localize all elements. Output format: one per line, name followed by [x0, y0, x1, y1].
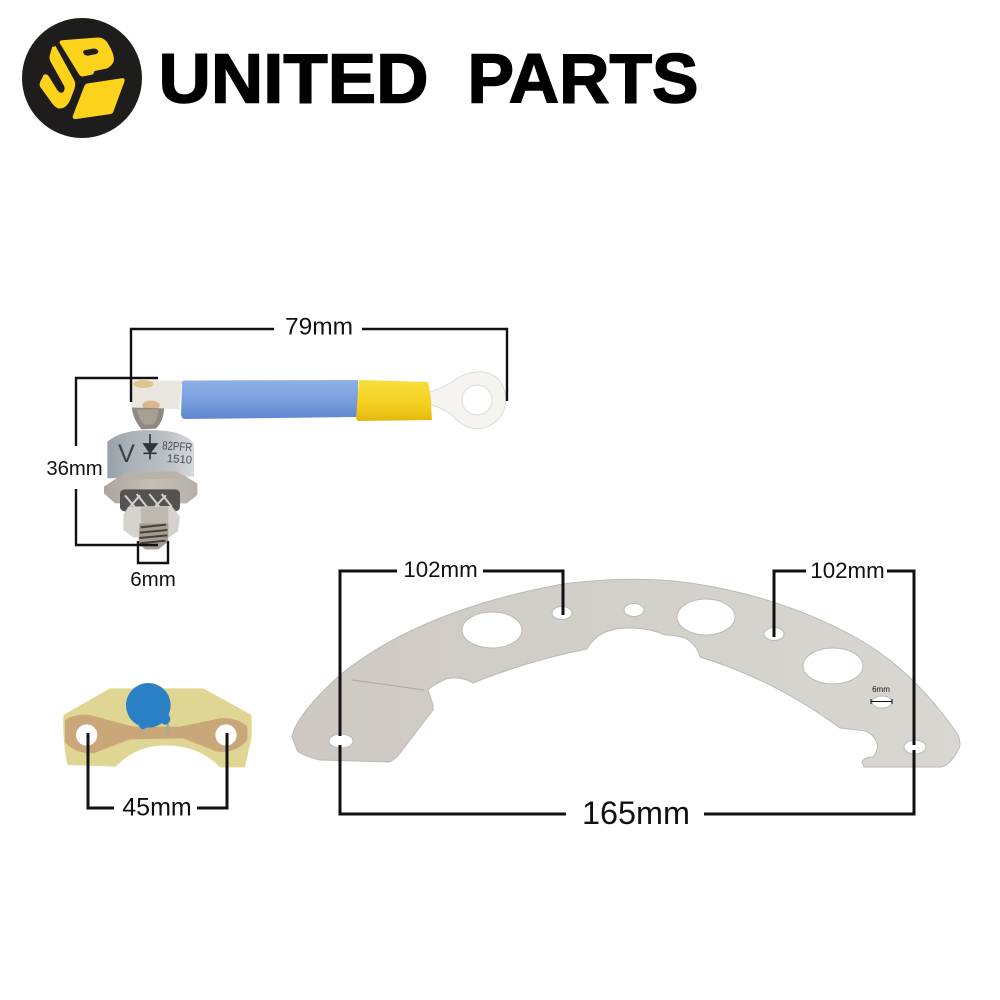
metal plate — [292, 579, 960, 767]
knurled washer — [120, 489, 180, 511]
dimension: 45mm — [88, 733, 227, 822]
diode with wire: 1510 — [166, 453, 192, 467]
hex nut — [123, 506, 180, 537]
diode tab — [132, 407, 164, 429]
logo letter P — [60, 38, 113, 76]
dimension: 6mm small hole — [871, 685, 892, 704]
dimension: 45mm: 45mm — [122, 794, 192, 822]
wire lug — [131, 381, 182, 409]
copper traces — [65, 715, 247, 753]
diode markings: 82PFR — [162, 438, 193, 454]
dimension: 102mm right: 102mm — [810, 558, 885, 583]
brand title — [158, 40, 698, 118]
dimension: 36mm: 36mm — [46, 458, 103, 480]
dimension: 6mm: 6mm — [130, 568, 176, 591]
logo letter J — [40, 47, 75, 108]
diode symbol — [143, 434, 157, 459]
diode with wire — [104, 372, 506, 549]
blue heat-shrink sleeve — [181, 380, 358, 419]
dimension: 102mm left — [340, 557, 563, 736]
circuit board — [63, 683, 252, 767]
threaded stud — [139, 523, 168, 549]
diode V mark: V — [118, 440, 135, 468]
logo — [22, 18, 142, 138]
diode cylinder body — [107, 430, 194, 478]
brand title: PARTS — [468, 40, 698, 118]
hex flange — [104, 471, 197, 503]
dimension: 102mm right — [774, 558, 914, 745]
capacitor legs — [144, 723, 168, 735]
board substrate — [63, 688, 252, 767]
yellow crimp — [356, 380, 432, 421]
dimension: 36mm — [46, 378, 158, 545]
dimension: 79mm — [131, 314, 507, 402]
dimension: 102mm left: 102mm — [403, 557, 478, 582]
dimension: 6mm small hole: 6mm — [872, 685, 890, 694]
dimension: 6mm — [130, 541, 176, 591]
dimension: 165mm: 165mm — [582, 795, 690, 831]
mounting holes — [76, 724, 97, 746]
dimension: 165mm — [340, 745, 914, 831]
blue varistor — [126, 683, 171, 729]
brand title: UNITED — [158, 40, 428, 118]
plate seam — [352, 680, 424, 690]
logo cube face — [73, 79, 124, 119]
solder points — [133, 380, 153, 388]
ring terminal — [428, 372, 506, 429]
dimension: 79mm: 79mm — [285, 314, 353, 340]
